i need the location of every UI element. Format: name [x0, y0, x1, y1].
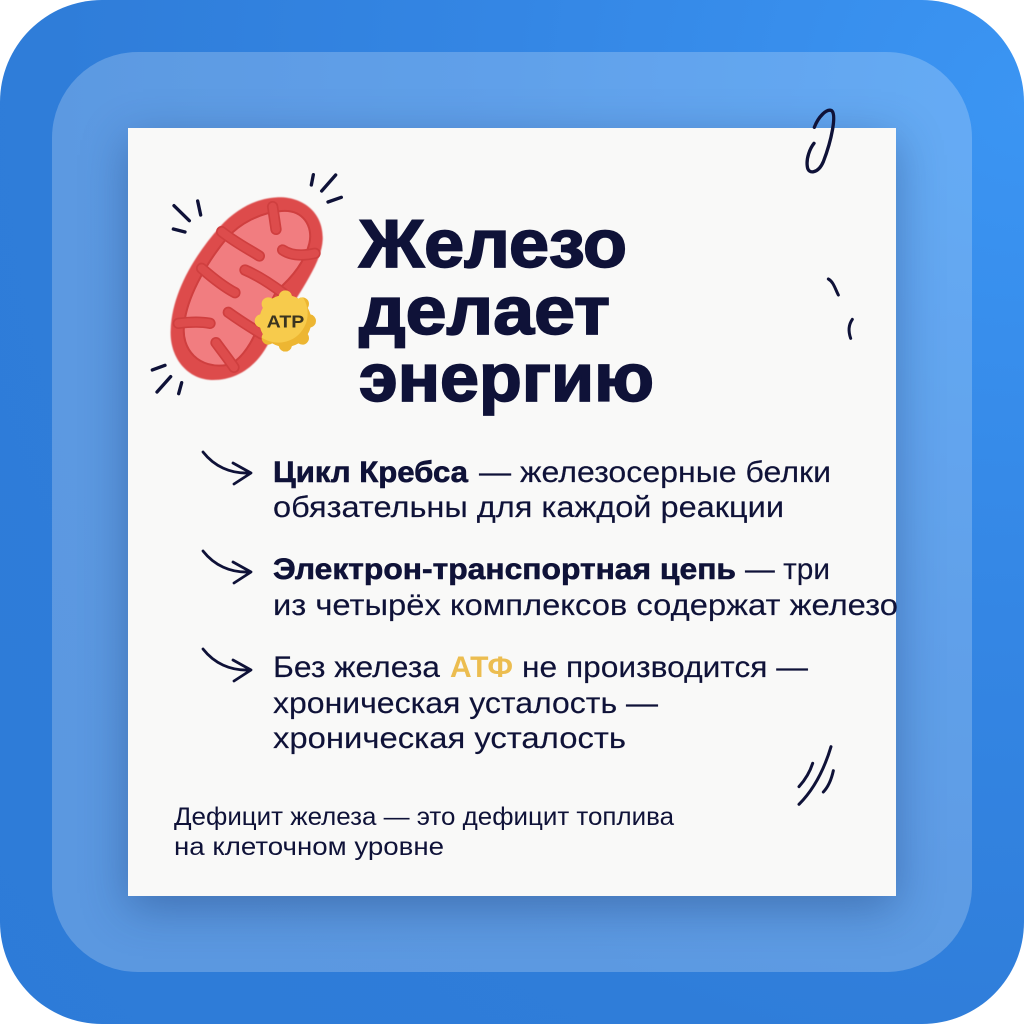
- cristae folds: [178, 207, 315, 367]
- bullet 3 text: не производится —: [522, 651, 808, 684]
- bullet 2 text: Электрон-транспортная цепь: [273, 553, 736, 586]
- bullet 3 text: хроническая усталость —: [273, 687, 658, 720]
- white paper card: [128, 128, 896, 896]
- bullet 3 text: хроническая усталость: [273, 722, 626, 755]
- doodle: three strokes: [799, 747, 833, 804]
- title: [358, 206, 654, 416]
- mitochondrion outer membrane: [171, 197, 323, 380]
- doodle: small ticks: [828, 279, 852, 338]
- title: Железо: [358, 206, 627, 282]
- arrow 2: [203, 551, 251, 583]
- bullet 1 text: — железосерные белки: [479, 456, 831, 489]
- title: делает: [359, 273, 610, 349]
- ATP badge: [254, 290, 316, 352]
- bullet 2 text: — три: [745, 553, 830, 586]
- bullet 1 text: Цикл Кребса: [273, 456, 468, 489]
- bullet 3 text: Без железа: [273, 651, 440, 684]
- footer note: [174, 803, 674, 861]
- icon: mitochondrion with ATP badge: [152, 175, 341, 394]
- footer note: Дефицит железа — это дефицит топлива: [174, 803, 674, 831]
- mitochondrion inner matrix: [184, 211, 310, 366]
- bullet 3 text: [273, 651, 808, 755]
- bullet 2 text: из четырёх комплексов содержат железо: [273, 589, 898, 622]
- bullet 2 text: [273, 553, 898, 622]
- arrow 1: [203, 452, 251, 484]
- arrow 3: [203, 649, 251, 681]
- footer note: на клеточном уровне: [174, 833, 444, 861]
- bullet 1 text: [273, 456, 831, 524]
- energy spark lines: [152, 175, 341, 394]
- title: энергию: [359, 340, 654, 416]
- bullet 3 text: АТФ: [450, 651, 513, 684]
- bullet 1 text: обязательны для каждой реакции: [273, 491, 784, 524]
- doodle: paperclip loop: [807, 110, 834, 172]
- artwork and text layer: [150, 108, 897, 860]
- ATP badge: ATP: [267, 312, 304, 332]
